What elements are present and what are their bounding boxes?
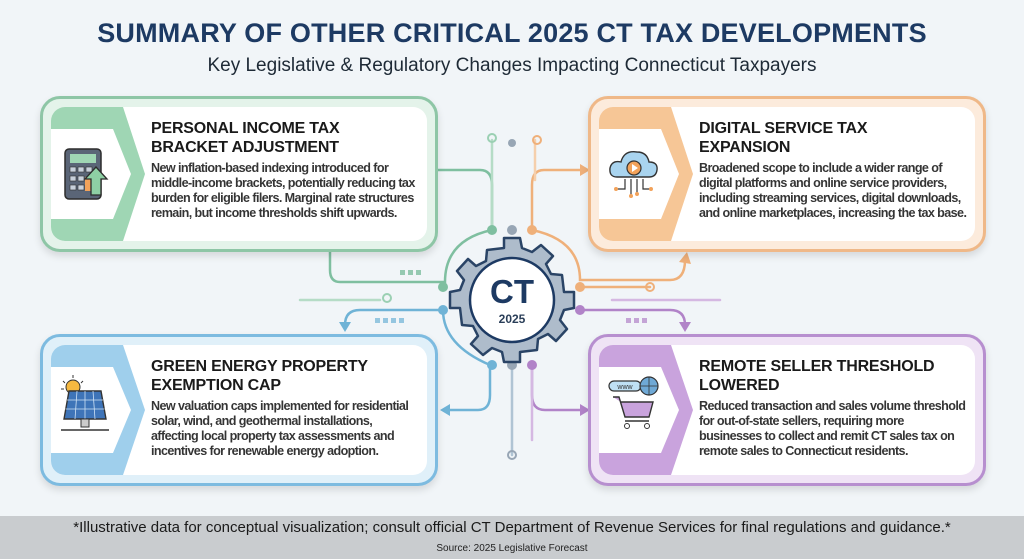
body text: incentives for renewable energy adoption. <box>151 444 378 458</box>
icon: cloud play <box>599 107 693 241</box>
body text: New valuation caps implemented for residential <box>151 399 408 413</box>
heading <box>151 358 368 394</box>
footer source: Source: 2025 Legislative Forecast <box>436 543 588 554</box>
footer band <box>0 516 1024 559</box>
gear: 2025 <box>499 312 526 326</box>
heading <box>151 120 340 156</box>
heading: GREEN ENERGY PROPERTY <box>151 358 368 375</box>
body text: New inflation-based indexing introduced for <box>151 161 388 175</box>
body text: Reduced transaction and sales volume threshold <box>699 399 965 413</box>
body text <box>151 399 408 458</box>
icon: calculator <box>51 107 145 241</box>
heading: BRACKET ADJUSTMENT <box>151 139 339 156</box>
body text: and online marketplaces, increasing the tax base. <box>699 206 966 220</box>
body text: middle-income brackets, potentially reducing tax <box>151 176 415 190</box>
title: SUMMARY OF OTHER CRITICAL 2025 CT TAX DEVELOPMENTS <box>97 18 927 48</box>
heading: LOWERED <box>699 377 779 394</box>
subtitle: Key Legislative & Regulatory Changes Impacting Connecticut Taxpayers <box>207 55 817 76</box>
heading <box>699 120 868 156</box>
icon: cart www <box>599 345 693 475</box>
panel: personal income tax <box>40 96 438 252</box>
body text <box>151 161 416 220</box>
heading: PERSONAL INCOME TAX <box>151 120 340 137</box>
gear: CT <box>490 273 534 310</box>
body text: burden for eligible filers. Marginal rate structures <box>151 191 414 205</box>
panel: digital service tax <box>588 96 986 252</box>
body text: remain, but income thresholds shift upwards. <box>151 206 397 220</box>
body text: including streaming services, digital downloads, <box>699 191 961 205</box>
body text: digital platforms and online service providers, <box>699 176 947 190</box>
gear <box>450 238 574 362</box>
body text: affecting local property tax assessments and <box>151 429 394 443</box>
body text: solar, wind, and geothermal installations, <box>151 414 372 428</box>
body text: remote sales to Connecticut residents. <box>699 444 908 458</box>
body text <box>699 161 966 220</box>
panel: green energy <box>40 334 438 486</box>
body text: for out-of-state sellers, requiring more <box>699 414 904 428</box>
panel: remote seller <box>588 334 986 486</box>
icon: cart www: www <box>616 384 634 391</box>
heading: DIGITAL SERVICE TAX <box>699 120 867 137</box>
heading <box>699 358 934 394</box>
heading: EXEMPTION CAP <box>151 377 281 394</box>
body text: Broadened scope to include a wider range of <box>699 161 942 175</box>
body text: businesses to collect and remit CT sales tax on <box>699 429 954 443</box>
heading: REMOTE SELLER THRESHOLD <box>699 358 934 375</box>
icon: solar panel <box>51 345 145 475</box>
body text <box>699 399 966 458</box>
footer disclaimer: *Illustrative data for conceptual visualization; consult official CT Department of Revenue Services for final regulations and guidance.* <box>73 519 951 536</box>
heading: EXPANSION <box>699 139 790 156</box>
